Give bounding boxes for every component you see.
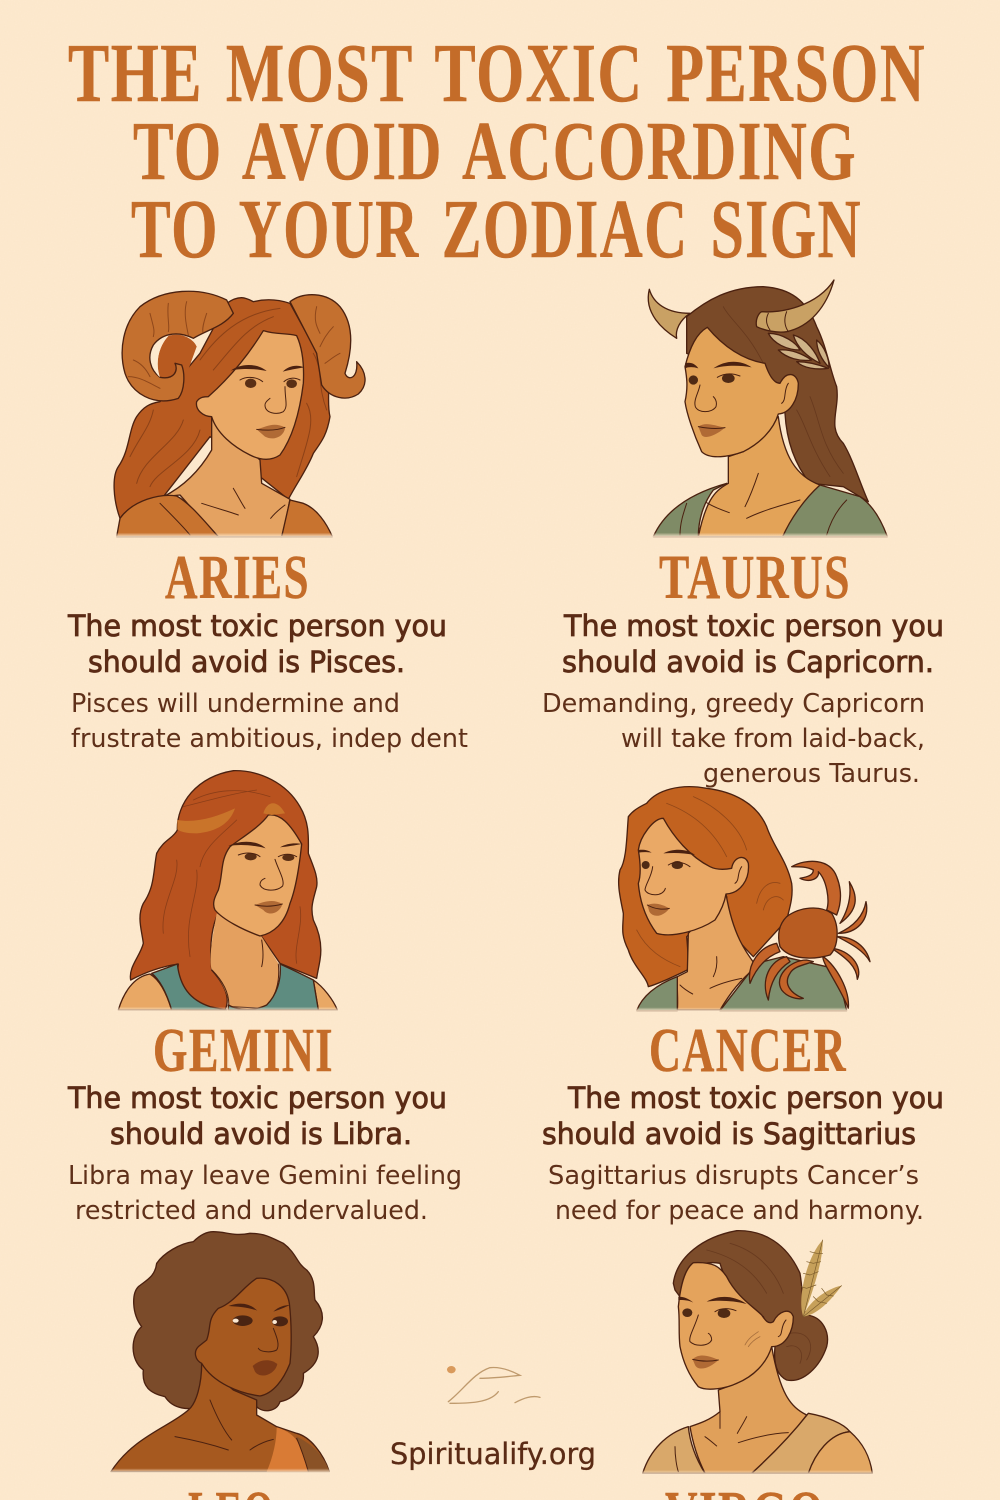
hair <box>130 771 321 1010</box>
fade <box>633 1007 850 1011</box>
text: Gemini advice: restricted and undervalued. <box>75 1196 428 1226</box>
left horn <box>648 289 690 338</box>
portrait: Leo woman with curly hair <box>108 1232 332 1473</box>
text: Aries advice: Pisces will undermine and <box>71 689 400 719</box>
teal top <box>152 964 318 1010</box>
curly hair <box>133 1232 322 1411</box>
portrait: Cancer woman with crab <box>619 787 870 1011</box>
fade <box>113 1007 340 1011</box>
face <box>196 331 304 459</box>
text: Taurus advice: will take from laid-back, <box>621 724 925 754</box>
text: Cancer advice: Sagittarius disrupts Cancer’s <box>548 1161 919 1191</box>
portrait: Gemini woman with headband <box>113 771 340 1011</box>
fade <box>650 533 890 537</box>
text: Aries advice <box>67 609 468 754</box>
text: Aries advice: frustrate ambitious, indep dent <box>71 724 468 754</box>
neck and chest <box>698 417 820 537</box>
dress <box>643 1412 872 1473</box>
right ram horn <box>290 295 365 398</box>
face <box>685 327 798 457</box>
dress <box>637 957 847 1011</box>
name: Gemini: GEMINI <box>153 1017 334 1085</box>
face <box>214 815 302 967</box>
wheat <box>801 1240 842 1317</box>
hair <box>619 787 792 987</box>
shoulders and neck <box>118 913 337 1010</box>
text: Gemini advice: should avoid is Libra. <box>110 1117 412 1151</box>
neck and chest <box>690 1347 807 1473</box>
icon: faint bird sketch <box>447 1366 540 1403</box>
name: Taurus: TAURUS <box>659 544 851 612</box>
crab <box>749 861 870 1008</box>
portrait: Taurus woman with bull horns <box>648 280 890 537</box>
text: Taurus advice: Demanding, greedy Capricorn <box>542 689 925 719</box>
text: Aries advice: The most toxic person you <box>67 609 447 643</box>
text: Cancer advice: should avoid is Sagittarius <box>542 1117 916 1151</box>
face <box>678 1263 793 1389</box>
hair <box>114 298 330 518</box>
text: Taurus advice: should avoid is Capricorn. <box>562 645 934 679</box>
brand: Spiritualify.org: Spiritualify.org <box>390 1437 596 1471</box>
text: Cancer advice <box>542 1081 944 1226</box>
text: Aries advice: should avoid is Pisces. <box>88 645 405 679</box>
text: Gemini advice <box>67 1081 462 1226</box>
hair <box>673 1231 827 1380</box>
dress <box>117 488 332 537</box>
neck and chest <box>163 417 290 537</box>
text: Gemini advice: Libra may leave Gemini feeling <box>68 1161 462 1191</box>
text: Taurus advice: The most toxic person you <box>563 609 944 643</box>
text: Taurus advice <box>542 609 944 789</box>
face <box>638 818 749 935</box>
title <box>68 27 926 276</box>
text: Taurus advice: generous Taurus. <box>703 759 920 789</box>
dress <box>653 473 887 537</box>
portrait: Virgo woman with wheat <box>640 1231 873 1475</box>
text: Cancer advice: The most toxic person you <box>567 1081 944 1115</box>
portrait: Aries woman with ram horns <box>113 291 365 537</box>
headband <box>177 803 285 833</box>
body <box>111 1363 329 1472</box>
fade <box>108 1468 332 1473</box>
name: Cancer: CANCER <box>649 1017 847 1085</box>
drape <box>175 1400 329 1472</box>
text: Cancer advice: need for peace and harmony. <box>555 1196 924 1226</box>
text: Gemini advice: The most toxic person you <box>67 1081 447 1115</box>
hair <box>687 287 868 502</box>
laurel leaves <box>768 333 829 369</box>
face <box>195 1278 291 1396</box>
fade <box>640 1470 873 1475</box>
neck and chest <box>677 894 757 1010</box>
fade <box>113 533 337 537</box>
right horn <box>756 280 834 332</box>
left ram horn <box>122 291 233 401</box>
name: Aries: ARIES <box>165 544 310 612</box>
